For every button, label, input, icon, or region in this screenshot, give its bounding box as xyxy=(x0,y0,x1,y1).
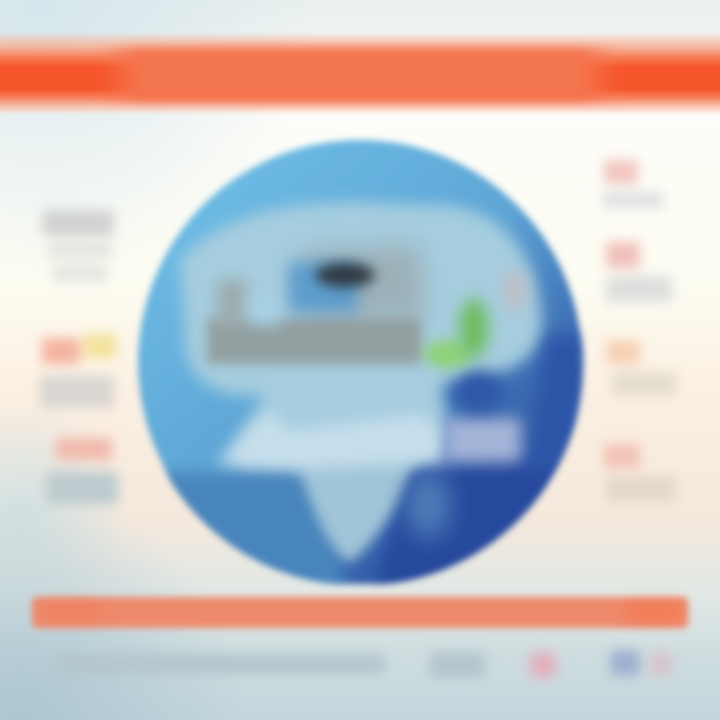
dark blue blob xyxy=(452,370,504,414)
right column text xyxy=(602,160,676,502)
right ocean edge xyxy=(525,335,585,470)
footer icon: blue xyxy=(610,650,640,676)
main content xyxy=(32,140,688,678)
map of India xyxy=(295,455,415,562)
right item 3 xyxy=(606,340,676,396)
banner end caps xyxy=(625,602,680,622)
lower left ocean xyxy=(150,472,345,590)
grey emblem halo xyxy=(300,245,425,320)
island xyxy=(406,471,450,539)
footer icon: red xyxy=(530,652,556,678)
globe xyxy=(138,140,585,590)
left item 3 xyxy=(46,438,118,504)
footer xyxy=(55,650,672,678)
pale upper landmass xyxy=(180,202,542,480)
dark emblem xyxy=(315,262,375,288)
lower orange banner xyxy=(32,597,688,628)
pale wordmark xyxy=(215,410,445,468)
blue emblem base xyxy=(288,262,358,312)
lower right ocean xyxy=(370,461,561,589)
footer text xyxy=(55,654,385,674)
left item 2 xyxy=(40,334,116,408)
right item 2 xyxy=(606,242,672,302)
green check mark xyxy=(424,298,489,369)
left item 1 xyxy=(42,210,114,282)
right item 1 xyxy=(602,160,664,208)
right item 4 xyxy=(604,444,676,502)
footer secondary text xyxy=(430,652,485,678)
left column text xyxy=(40,210,118,504)
wordmark right side on dark xyxy=(445,418,521,462)
small pink marker xyxy=(503,272,527,310)
title text, illegible xyxy=(100,48,620,100)
footer icon: pink xyxy=(650,652,672,676)
grey skyline text xyxy=(207,280,422,364)
title banner xyxy=(0,32,720,116)
